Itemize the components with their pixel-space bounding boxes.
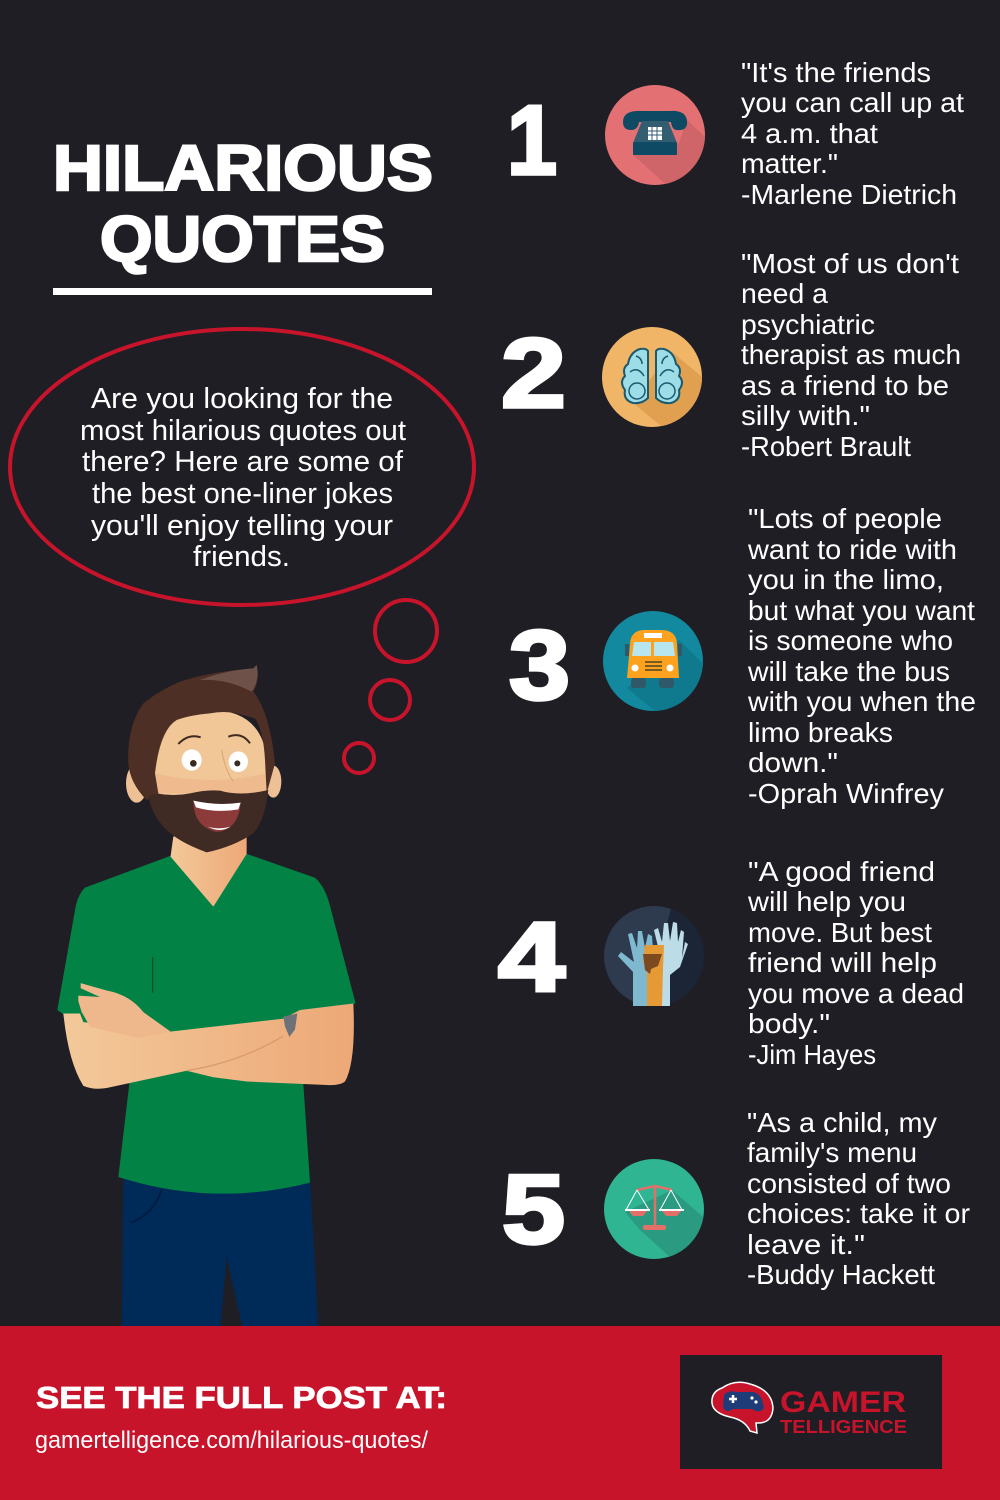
quote 2: psychiatric bbox=[741, 309, 875, 340]
footer heading: SEE THE FULL POST AT: bbox=[36, 1380, 447, 1415]
quote 3: but what you want bbox=[748, 595, 975, 626]
quote 5: -Buddy Hackett bbox=[747, 1259, 935, 1290]
illustration: bearded man with crossed arms bbox=[57, 665, 356, 1331]
footer band bbox=[0, 1326, 1000, 1500]
quote 3: limo breaks bbox=[748, 717, 893, 748]
quote 4 bbox=[747, 856, 964, 1070]
quote 4: -Jim Hayes bbox=[748, 1039, 876, 1070]
quote 3: with you when the bbox=[747, 686, 976, 717]
icon: scales bbox=[604, 1159, 704, 1259]
title: HILARIOUS bbox=[53, 132, 433, 204]
logo: GamerTelligence: TELLIGENCE bbox=[780, 1417, 907, 1437]
icon: raised hands bbox=[604, 906, 704, 1006]
quote 4: "A good friend bbox=[748, 856, 935, 887]
icon: telephone bbox=[605, 85, 705, 185]
quote 5 bbox=[747, 1107, 970, 1290]
quote 2: silly with." bbox=[741, 400, 870, 431]
quote 4: will help you bbox=[747, 886, 906, 917]
quote 5: leave it." bbox=[747, 1229, 865, 1260]
quote 3 bbox=[747, 503, 976, 809]
number 3: 3 bbox=[509, 610, 570, 720]
logo: GamerTelligence bbox=[680, 1355, 942, 1469]
speech bubble: intro bbox=[10, 329, 474, 605]
quote 3: "Lots of people bbox=[748, 503, 942, 534]
quote 3: down." bbox=[748, 747, 838, 778]
quote 3: is someone who bbox=[748, 625, 953, 656]
quote 2: -Robert Brault bbox=[741, 431, 911, 462]
speech bubble: intro: Are you looking for the bbox=[91, 383, 393, 415]
quote 4: move. But best bbox=[748, 917, 932, 948]
quote 2 bbox=[741, 248, 961, 462]
footer url: gamertelligence.com/hilarious-quotes/ bbox=[35, 1427, 428, 1454]
speech bubble: intro: you'll enjoy telling your bbox=[91, 510, 393, 542]
quote 5: "As a child, my bbox=[747, 1107, 937, 1138]
number 2: 2 bbox=[501, 318, 566, 428]
quote 3: -Oprah Winfrey bbox=[748, 778, 944, 809]
number 5: 5 bbox=[502, 1154, 565, 1264]
quote 1: "It's the friends bbox=[741, 57, 931, 88]
icon: school bus bbox=[603, 611, 703, 711]
quote 1: matter." bbox=[741, 148, 838, 179]
quote 1: -Marlene Dietrich bbox=[741, 179, 957, 210]
icon: brain bbox=[602, 327, 702, 427]
quote 1: 4 a.m. that bbox=[741, 118, 878, 149]
quote 5: consisted of two bbox=[747, 1168, 951, 1199]
quote 2: therapist as much bbox=[741, 339, 961, 370]
quote 3: will take the bus bbox=[747, 656, 950, 687]
quote 2: need a bbox=[741, 278, 828, 309]
quote 5: choices: take it or bbox=[747, 1198, 970, 1229]
logo: GamerTelligence: GAMER bbox=[780, 1386, 906, 1419]
speech bubble: intro: there? Here are some of bbox=[82, 446, 404, 478]
quote 2: as a friend to be bbox=[741, 370, 949, 401]
speech bubble: intro: friends. bbox=[193, 541, 290, 573]
thought bubbles bbox=[344, 600, 437, 773]
number 1: 1 bbox=[507, 85, 557, 195]
quote 3: want to ride with bbox=[747, 534, 957, 565]
quote 2: "Most of us don't bbox=[741, 248, 959, 279]
quote 5: family's menu bbox=[747, 1137, 917, 1168]
quote 4: you move a dead bbox=[748, 978, 964, 1009]
title underline bbox=[53, 288, 432, 295]
title bbox=[53, 132, 433, 275]
quote 1 bbox=[741, 57, 964, 210]
quote 1: you can call up at bbox=[741, 87, 964, 118]
title: QUOTES bbox=[100, 203, 385, 275]
speech bubble: intro: the best one-liner jokes bbox=[92, 478, 393, 510]
speech bubble: intro: most hilarious quotes out bbox=[80, 415, 406, 447]
quote 4: body." bbox=[748, 1008, 830, 1039]
quote 4: friend will help bbox=[748, 947, 937, 978]
number 4: 4 bbox=[498, 902, 565, 1012]
quote 3: you in the limo, bbox=[748, 564, 944, 595]
